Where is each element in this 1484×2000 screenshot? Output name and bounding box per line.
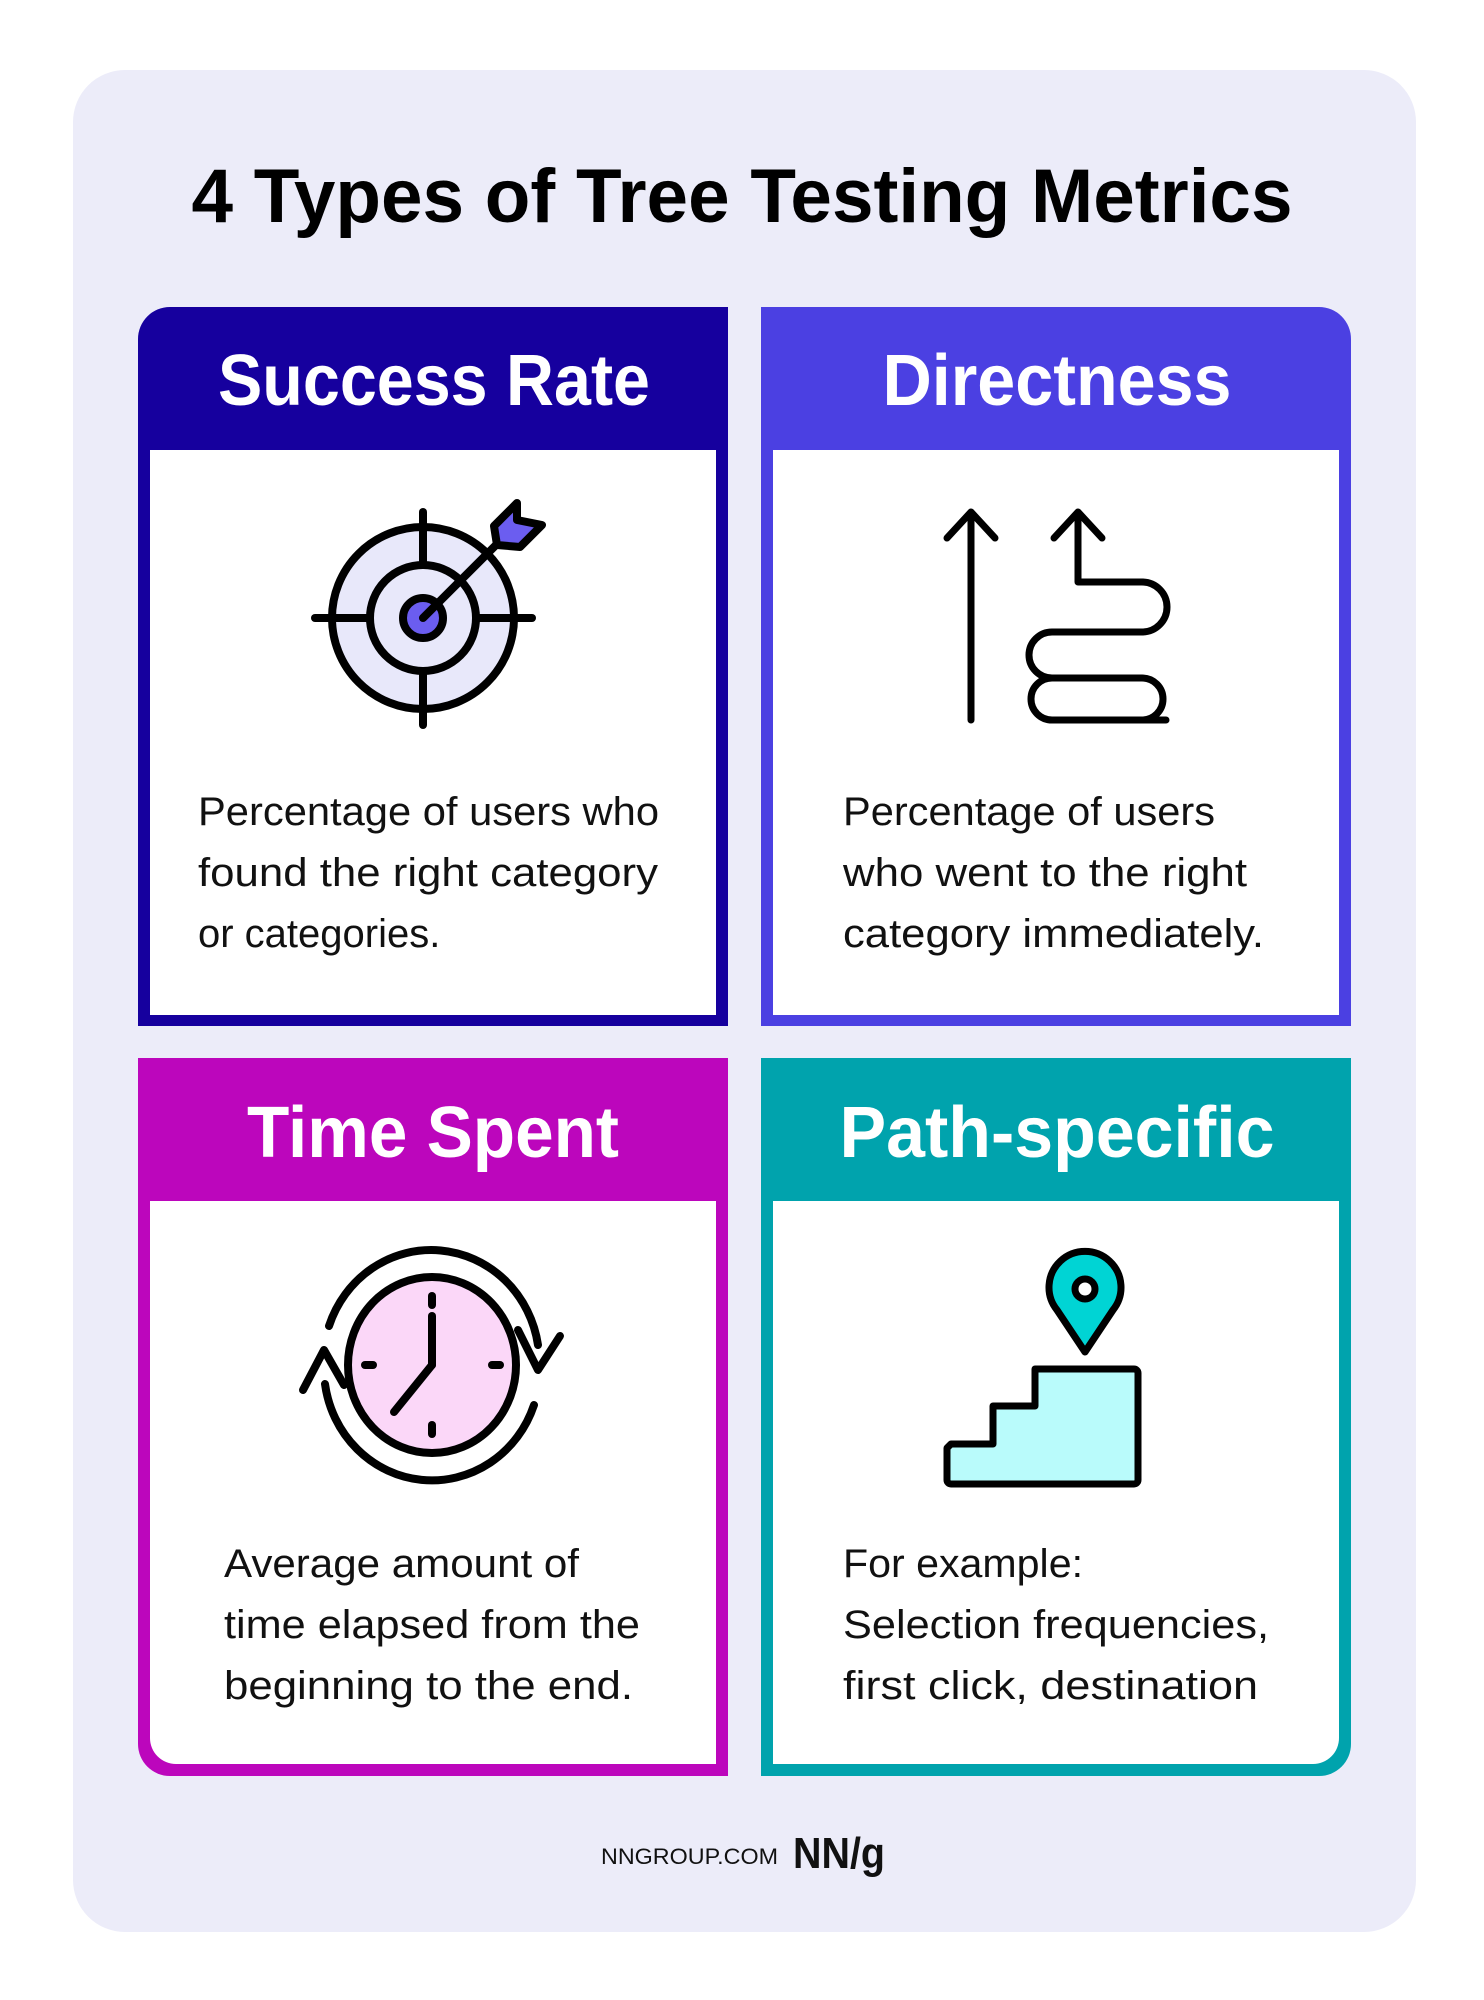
heading: path-specific: Path-specific	[840, 1093, 1274, 1173]
title: 4 Types of Tree Testing Metrics	[192, 154, 1292, 239]
icon: target	[315, 503, 542, 725]
panel: directness	[761, 307, 1351, 1026]
icon: stairs with pin	[947, 1251, 1138, 1484]
panel: path-specific	[761, 1058, 1351, 1776]
text: path-specific description: Selection frequencies,	[843, 1603, 1269, 1647]
panel: time spent	[138, 1058, 728, 1776]
heading: time spent: Time Spent	[247, 1093, 619, 1173]
heading: success rate: Success Rate	[218, 341, 650, 421]
text: directness description: category immediately.	[843, 912, 1264, 956]
text: directness description: Percentage of users	[843, 790, 1215, 834]
icon: clock	[303, 1250, 560, 1480]
text: success rate description: Percentage of users who	[198, 790, 659, 834]
text: time spent description: beginning to the end.	[224, 1664, 633, 1708]
icon: arrows	[947, 512, 1167, 720]
footer logo: NN/g	[793, 1829, 885, 1878]
text: time spent description: Average amount of	[224, 1542, 580, 1586]
text: time spent description: time elapsed from the	[224, 1603, 640, 1647]
text: success rate description: or categories.	[198, 912, 440, 956]
text: directness description: who went to the right	[842, 851, 1247, 895]
footer logo: NNGROUP.COM	[601, 1844, 778, 1869]
text: success rate description: found the right category	[198, 851, 658, 895]
text: path-specific description: For example:	[843, 1542, 1083, 1586]
heading: directness: Directness	[882, 341, 1232, 421]
footer logo	[601, 1829, 885, 1878]
panel: success rate	[138, 307, 728, 1026]
text: path-specific description: first click, destination	[843, 1664, 1258, 1708]
